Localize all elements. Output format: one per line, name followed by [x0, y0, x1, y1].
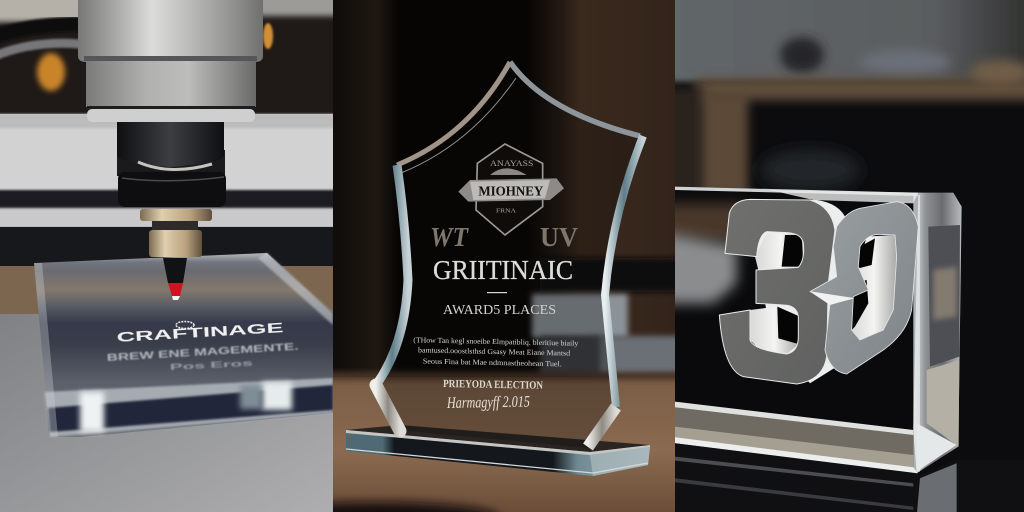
trophy base [346, 425, 650, 476]
trophy paragraph: bamtused.ooostlsthsd Gsasy Meat Eiane Mantsd [418, 345, 570, 358]
glass shield [376, 62, 645, 448]
glass block [675, 186, 962, 512]
panel: CNC engraving machine [0, 0, 353, 512]
room background and table [333, 0, 675, 512]
panel: crystal award trophy [333, 0, 675, 512]
panel: 3D numeral acrylic block [640, 0, 1024, 512]
badge logo: ANAYASS [490, 159, 533, 168]
numeral 3: chrome extrusion [750, 199, 847, 383]
trophy paragraph: (THow Tan kegl snoeibe Elmpatibliq. bleritiue biaily [413, 335, 579, 348]
right numeral chrome inner [852, 235, 897, 340]
spindle and engraving tip [78, 0, 263, 300]
left numeral 3 face [719, 199, 835, 384]
plate text: third line: Pos Eros [170, 358, 254, 372]
plate text: CRAFTINAGE: CRAFTINAGE [116, 320, 284, 345]
trophy text: UV: UV [540, 222, 578, 252]
trophy subtitle: AWARD5 PLACES [443, 302, 556, 317]
blurred studio background [675, 0, 1024, 190]
badge logo: MIOHNEY [478, 184, 543, 199]
right numeral face [810, 202, 918, 374]
engraved plate logo [176, 322, 194, 328]
badge logo [458, 144, 564, 235]
badge logo: FRNA [496, 208, 516, 215]
trophy paragraph [414, 337, 578, 366]
trophy signature: Harmagyff 2.015 [446, 394, 530, 412]
trophy paragraph: Seous Fina bat Mae ndmnastheohean Tuel. [423, 356, 562, 368]
machine background [0, 0, 353, 512]
plate text: second line: BREW ENE MAGEMENTE. [107, 342, 299, 364]
trophy election line: PRIEYODA ELECTION [443, 378, 543, 392]
acrylic plate [34, 253, 333, 437]
trophy title: GRIITINAIC [433, 255, 573, 285]
trophy text: WT: WT [430, 222, 469, 252]
